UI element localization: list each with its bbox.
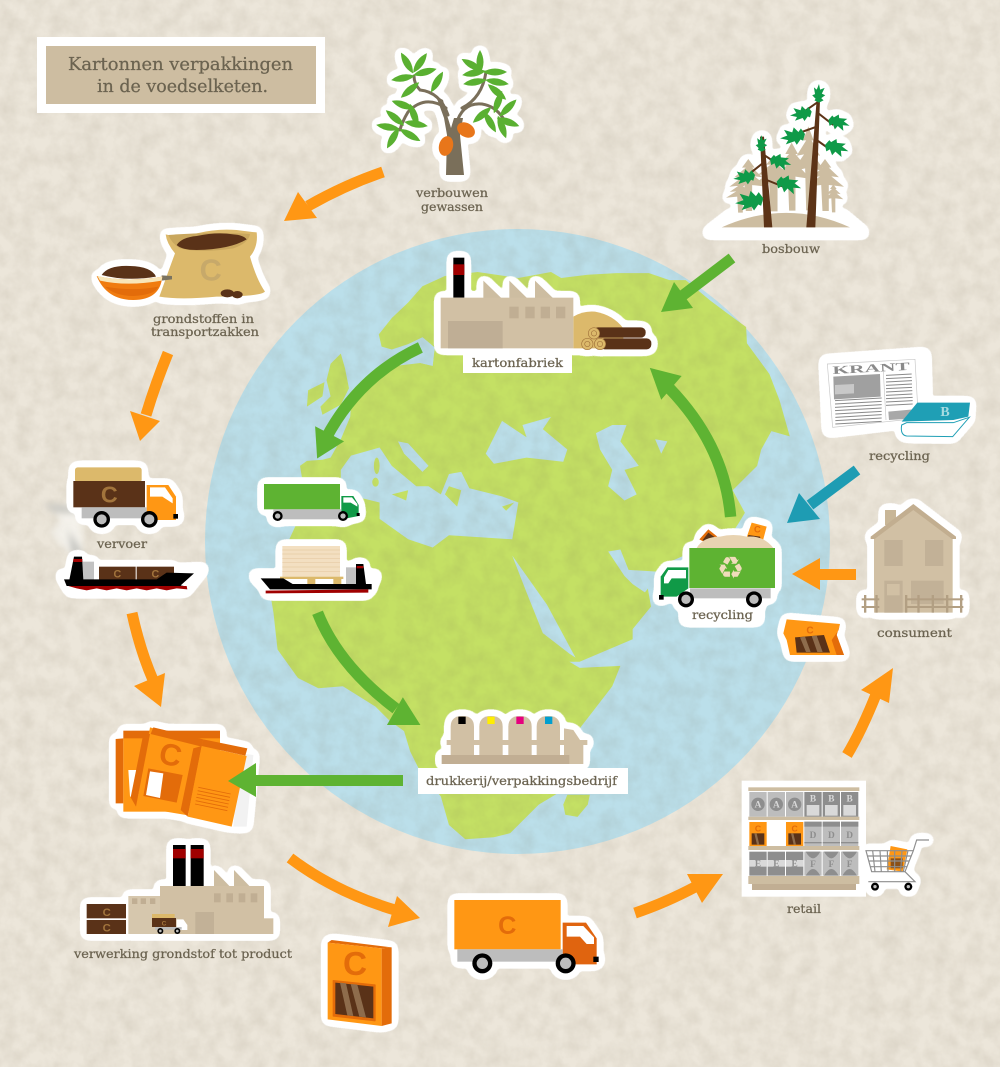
arrow: printing to cartons	[228, 763, 403, 797]
icon: shopping cart	[866, 840, 929, 891]
arrow: delivery truck to retail	[635, 874, 723, 913]
arrow: retail to consumer	[847, 668, 893, 755]
arrow: paper to recycling	[787, 470, 857, 523]
arrow: sack to truck	[130, 353, 168, 441]
icon: orange delivery truck	[454, 900, 599, 973]
icon: retail shelves: E	[792, 860, 798, 870]
icon: cereal box: C	[343, 946, 367, 983]
title box: Kartonnen verpakkingen	[68, 54, 293, 75]
label: verbouwen gewassen	[415, 185, 488, 214]
icon: cereal box	[328, 940, 392, 1026]
icon: crumpled carton	[783, 619, 844, 655]
label: verwerking grondstof tot product: verwerking grondstof tot product	[73, 946, 292, 961]
label: bosbouw: bosbouw	[762, 241, 820, 256]
arrow: factory to delivery truck	[290, 858, 420, 927]
icon: retail shelves: D	[846, 831, 853, 841]
icon: retail shelves: D	[828, 831, 835, 841]
label: retail: retail	[787, 901, 821, 916]
icon: brown truck	[73, 467, 178, 528]
icon: newspaper and book: B	[940, 405, 950, 420]
icon: green truck	[264, 484, 360, 521]
icon: smoke	[43, 503, 83, 555]
icon: cocoa tree	[376, 50, 520, 175]
icon: retail shelves: A	[773, 801, 780, 811]
title box: in de voedselketen.	[97, 76, 268, 97]
icon: retail shelves: F	[847, 860, 853, 870]
icon: recycling truck	[659, 523, 775, 621]
icon: retail shelves: B	[847, 795, 853, 805]
icon: processing factory: C	[103, 907, 111, 919]
icon: processing factory	[87, 845, 273, 934]
arrow: forestry to factory	[661, 258, 732, 312]
icon: carton blanks: C	[156, 736, 185, 774]
icon: container ship: C	[151, 568, 159, 580]
icon: newspaper and book: KRANT	[832, 361, 911, 377]
icon: retail shelves: F	[810, 860, 816, 870]
icon: crumpled carton: C	[806, 625, 814, 636]
icon: recycling truck: ♻	[717, 552, 744, 587]
icon: processing factory: C	[162, 920, 167, 927]
icon: forest	[707, 84, 865, 233]
arrow: recycling to factory	[650, 368, 731, 517]
icon: orange delivery truck: C	[498, 912, 516, 940]
icon: retail shelves: E	[755, 860, 761, 870]
icon: carton blanks	[116, 727, 253, 827]
icon: retail shelves: A	[791, 801, 798, 811]
icon: retail shelves: B	[810, 795, 816, 805]
icon: sack and cocoa bowl: C	[200, 254, 222, 288]
icon: newspaper and book	[825, 353, 970, 437]
icon: container ship	[61, 557, 204, 592]
icon: house	[862, 504, 963, 613]
icon: brown truck: C	[101, 482, 118, 508]
icon: cardboard factory with logs	[441, 258, 651, 350]
arrow: consumer to recycling	[792, 558, 856, 590]
label: grondstoffen in transportzakken	[151, 311, 259, 339]
icon: container ship: C	[113, 568, 121, 580]
arrow: factory to transport	[315, 347, 420, 458]
label: consument: consument	[877, 625, 952, 640]
icon: retail shelves: C	[792, 824, 799, 834]
label: verbouwen gewassen: gewassen	[421, 199, 483, 214]
icon: retail shelves: E	[773, 860, 779, 870]
label: drukkerij/verpakkingsbedrijf: drukkerij/verpakkingsbedrijf	[426, 773, 618, 788]
label: recycling (paper): recycling	[869, 448, 930, 463]
icon: retail shelves	[742, 781, 866, 897]
icon: processing factory: C	[103, 922, 111, 934]
icon: retail shelves: C	[755, 824, 762, 834]
icon: retail shelves: A	[755, 801, 762, 811]
label: kartonfabriek: kartonfabriek	[472, 355, 563, 370]
label: recycling (truck): recycling	[692, 607, 753, 622]
icon: retail shelves: D	[810, 831, 817, 841]
arrow: transport to printing	[318, 613, 420, 725]
icon: retail shelves: B	[828, 795, 834, 805]
title box	[37, 37, 325, 113]
globe	[205, 229, 830, 854]
label: vervoer: vervoer	[96, 536, 147, 551]
icon: recycling truck: C	[754, 525, 761, 535]
label: verbouwen gewassen: verbouwen	[415, 185, 488, 200]
label: kartonfabriek	[463, 350, 572, 373]
icon: ship with cardboard pallet	[253, 546, 377, 594]
icon: printing press	[442, 716, 587, 764]
icon: retail shelves: F	[828, 860, 834, 870]
label: drukkerij/verpakkingsbedrijf	[418, 768, 628, 794]
icon: sack and cocoa bowl	[97, 230, 265, 300]
arrow: ship to cartons	[132, 613, 165, 707]
arrow: tree to sack	[284, 172, 383, 221]
label: grondstoffen in transportzakken: transportzakken	[151, 324, 259, 339]
label: grondstoffen in transportzakken: grondstoffen in	[153, 311, 254, 326]
